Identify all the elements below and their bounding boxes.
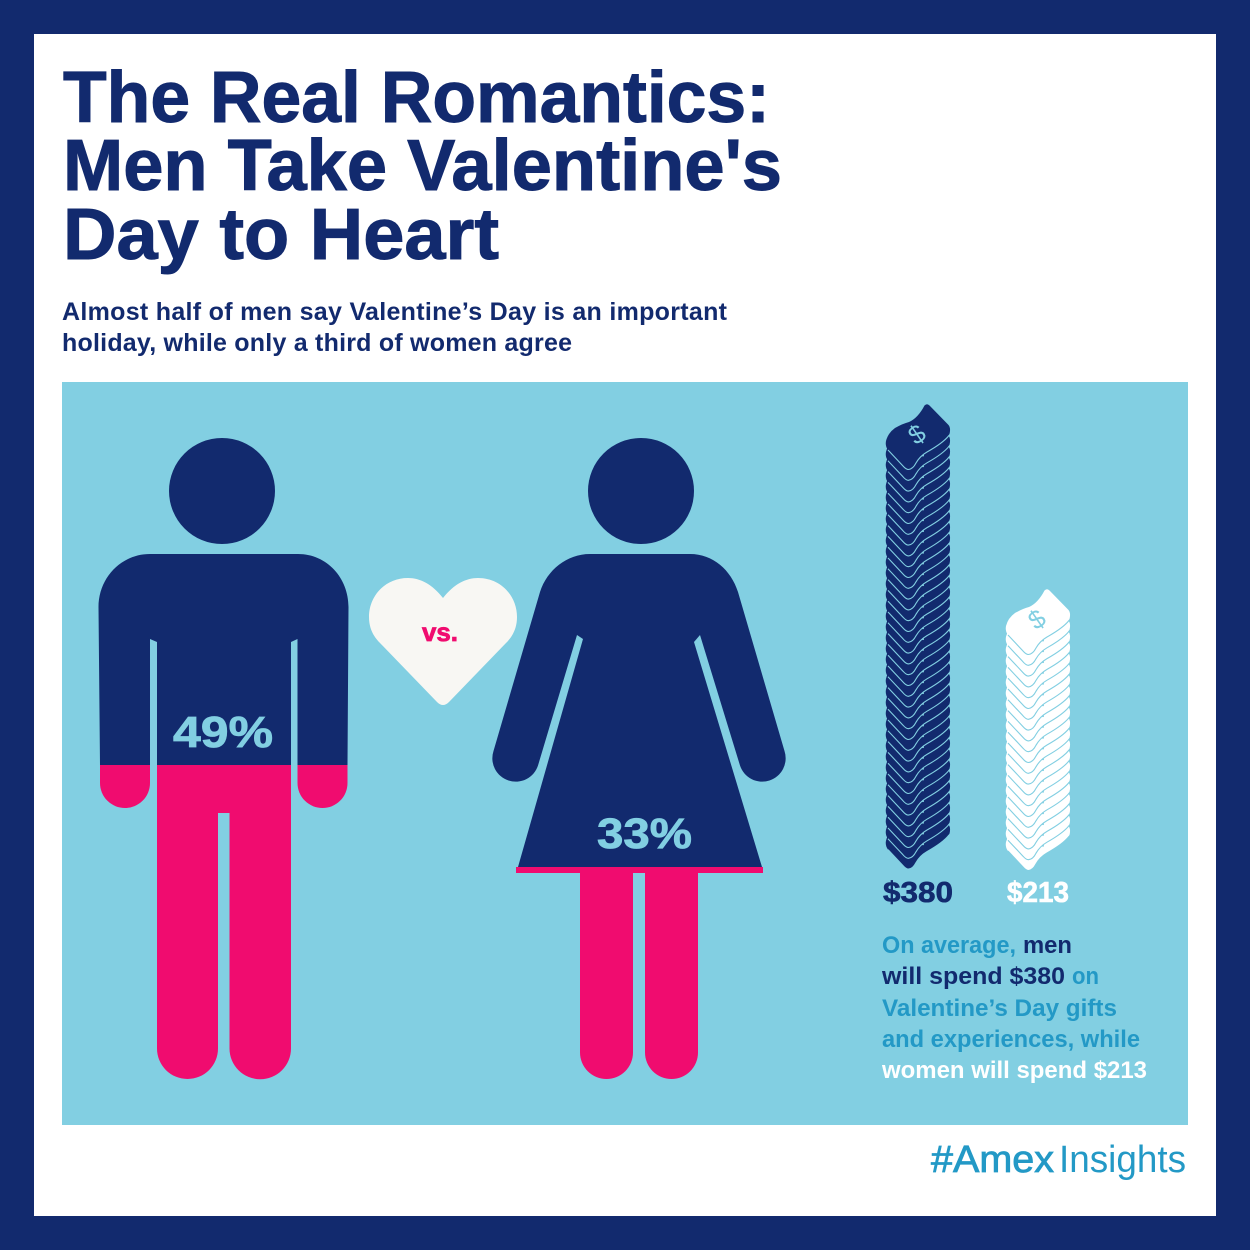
hashtag: #Amex — [931, 1139, 1054, 1181]
woman figure — [492, 438, 786, 1079]
main light blue panel — [62, 382, 1188, 1125]
woman pink legs and hem — [516, 867, 763, 1079]
hashtag — [931, 1139, 1186, 1181]
man head — [169, 438, 275, 544]
man navy torso and arms — [98, 554, 348, 765]
woman percentage: 33% — [597, 810, 692, 858]
spending description — [881, 932, 1147, 1084]
hashtag: Insights — [1059, 1139, 1186, 1181]
subtitle — [62, 298, 728, 357]
heart with vs. label — [369, 578, 517, 705]
spending description: will spend $380 — [881, 963, 1065, 990]
man figure — [98, 438, 348, 1079]
man percentage: 49% — [173, 708, 273, 757]
title: Day to Heart — [63, 195, 499, 275]
dollar sign on white bill: $ — [1022, 603, 1052, 636]
dollar sign on navy bill: $ — [902, 418, 932, 451]
subtitle: holiday, while only a third of women agree — [62, 329, 572, 357]
title: The Real Romantics: — [63, 58, 770, 138]
spending description: on — [1072, 963, 1099, 990]
spending description: women will spend $213 — [881, 1057, 1147, 1084]
title — [63, 58, 782, 275]
subtitle: Almost half of men say Valentine’s Day is an important — [62, 298, 728, 326]
woman navy dress and arms — [492, 554, 786, 867]
spending description: Valentine’s Day gifts — [882, 995, 1117, 1022]
heart — [369, 578, 517, 705]
white money stack — [1006, 589, 1070, 870]
navy money stack — [886, 404, 950, 869]
spending description: men — [1023, 932, 1072, 959]
vs. label: vs. — [422, 617, 458, 647]
title: Men Take Valentine's — [63, 126, 782, 206]
spending description: and experiences, while — [882, 1026, 1140, 1053]
women amount label: $213 — [1007, 877, 1069, 909]
men amount label: $380 — [883, 877, 953, 909]
woman head — [588, 438, 694, 544]
man pink fill: legs and hands — [100, 765, 348, 1079]
spending description: On average, — [882, 932, 1016, 959]
